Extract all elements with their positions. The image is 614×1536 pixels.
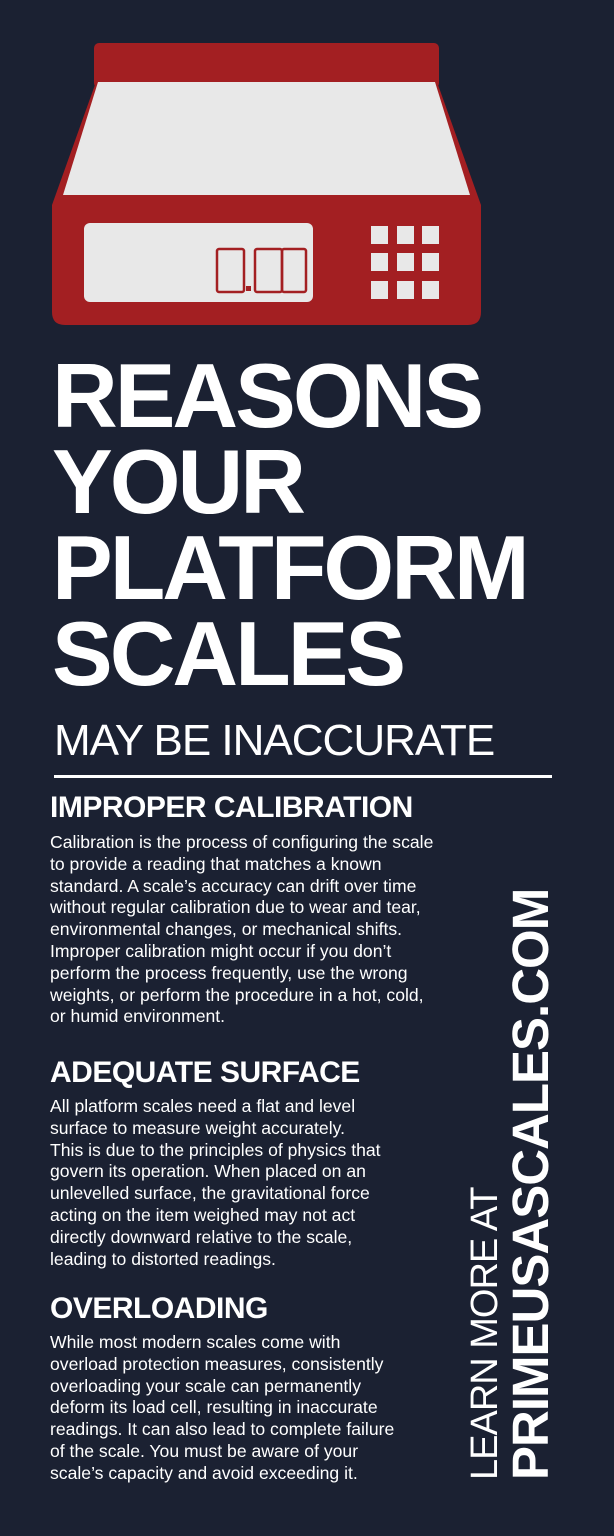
text: overloading: While most modern scales come with overload protection measures, consistently overloading your scale can permanently deform its load cell, resulting in inaccurate readings. It can also lead to complete failure of the scale. You must be aware of your scale’s capacity and avoid exceeding it. bbox=[50, 1332, 394, 1483]
text: surface: unlevelled surface, the gravitational force bbox=[50, 1183, 370, 1203]
text: surface: leading to distorted readings. bbox=[50, 1249, 276, 1269]
text: surface: directly downward relative to the scale, bbox=[50, 1227, 352, 1247]
heading: overloading: OVERLOADING bbox=[50, 1292, 268, 1325]
title: YOUR bbox=[52, 432, 303, 533]
text: surface: All platform scales need a flat and level bbox=[50, 1096, 355, 1116]
title: SCALES bbox=[52, 604, 403, 705]
text: calibration: Calibration is the process of configuring the scale to provide a reading that matches a known standard. A scale’s accuracy can drift over time without regular calibration due to wear and tear, environmental changes, or mechanical shifts. Improper calibration might occur if you don’t perform the process frequently, use the wrong weights, or perform the procedure in a hot, cold, or humid environment. bbox=[50, 832, 433, 1026]
text: surface: surface to measure weight accurately. bbox=[50, 1118, 345, 1138]
vertical cta: PRIMEUSASCALES.COM bbox=[502, 889, 559, 1480]
vertical cta: LEARN MORE AT bbox=[464, 1188, 506, 1480]
icon: platform scale bbox=[52, 43, 481, 325]
text: surface bbox=[50, 1096, 381, 1269]
title bbox=[52, 346, 527, 705]
subtitle: MAY BE INACCURATE bbox=[54, 716, 494, 765]
vertical cta bbox=[464, 889, 559, 1480]
text: surface: acting on the item weighed may not act bbox=[50, 1205, 355, 1225]
heading: adequate surface: ADEQUATE SURFACE bbox=[50, 1056, 360, 1089]
title: PLATFORM bbox=[52, 518, 527, 619]
text: surface: govern its operation. When placed on an bbox=[50, 1161, 366, 1181]
heading: improper calibration: IMPROPER CALIBRATION bbox=[50, 791, 413, 824]
title: REASONS bbox=[52, 346, 481, 447]
text: surface: This is due to the principles of physics that bbox=[50, 1140, 381, 1160]
